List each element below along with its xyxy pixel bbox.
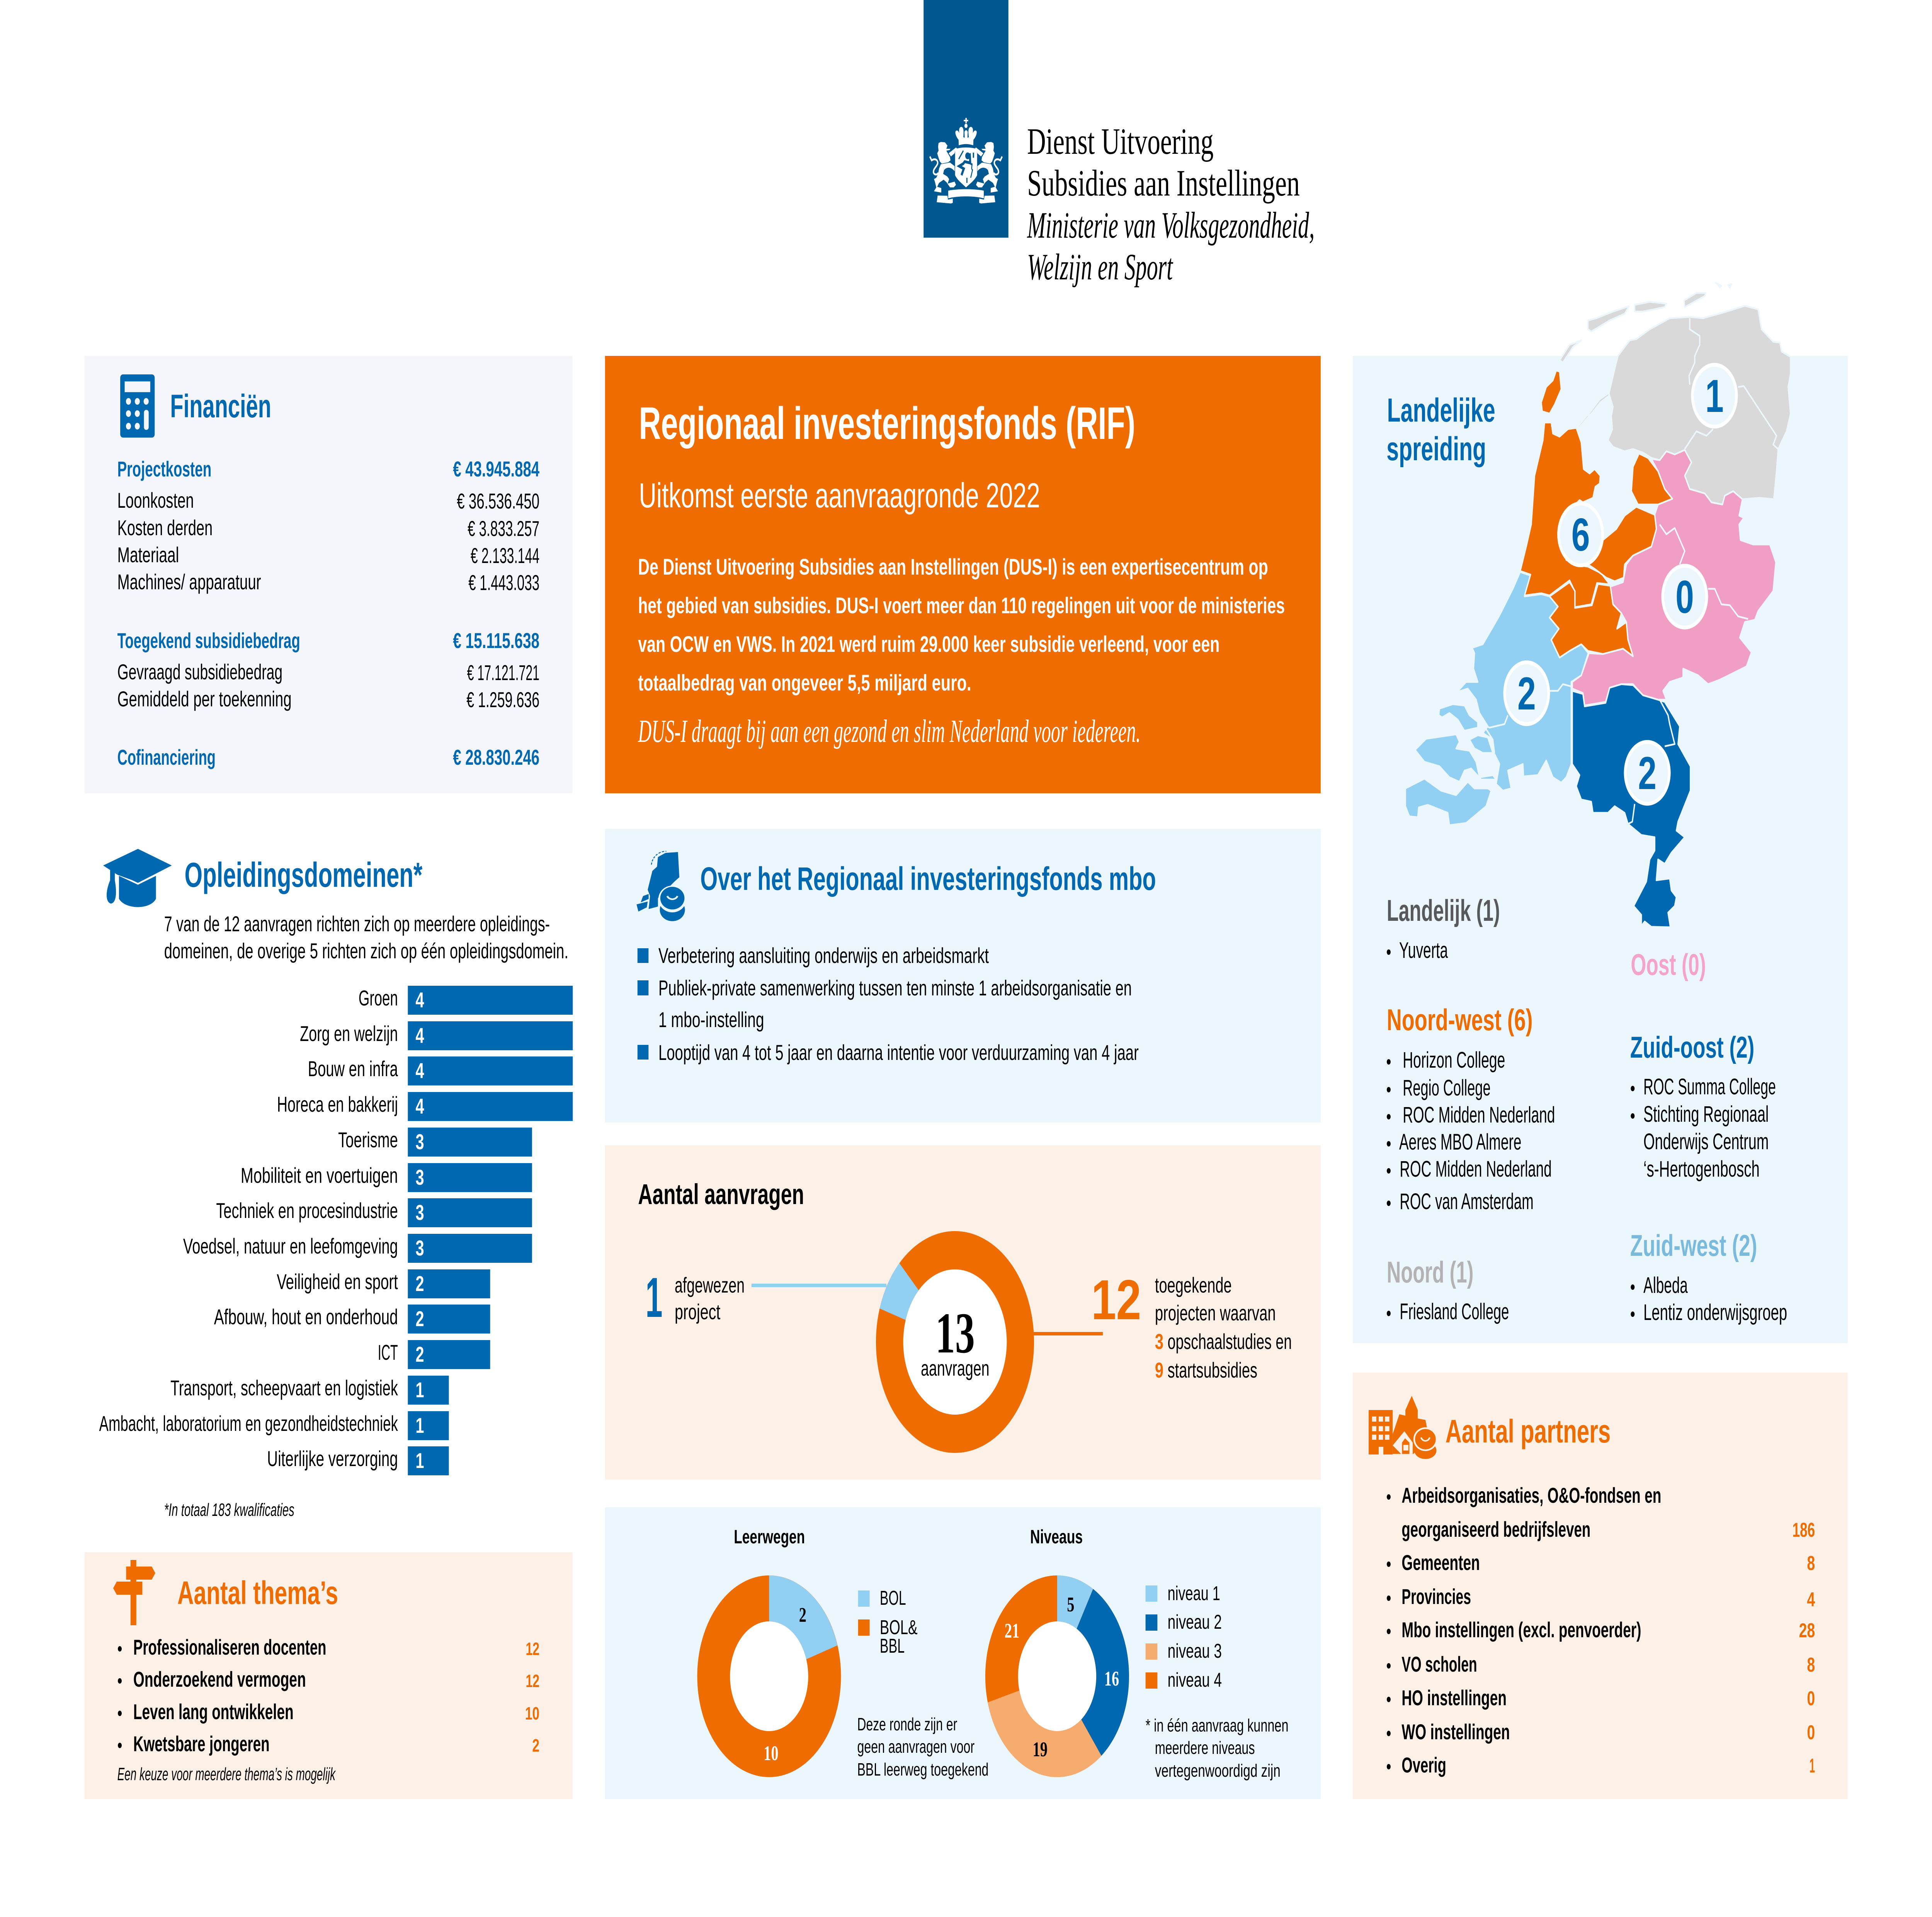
table: project costs: Cofinanciering bbox=[117, 745, 216, 770]
legend: Leerwegen: BBL bbox=[880, 1635, 905, 1657]
list: partners: 28 bbox=[1799, 1619, 1815, 1642]
legend: Niveaus: niveau 2 bbox=[1168, 1611, 1222, 1633]
donut chart: 13 aanvragen: aanvragen bbox=[921, 1356, 990, 1381]
list: Noord-west: ROC Midden Nederland bbox=[1400, 1156, 1552, 1182]
panel: Over het Regionaal investeringsfonds mbo bbox=[605, 829, 1321, 1123]
bar chart: domains: Veiligheid en sport bbox=[277, 1270, 398, 1294]
callout: 1 afgewezen: project bbox=[675, 1300, 721, 1324]
list: Noord-west: ROC Midden Nederland bbox=[1403, 1102, 1555, 1128]
bar chart: domains: 4 bbox=[415, 1024, 424, 1048]
note: Leerwegen: geen aanvragen voor bbox=[857, 1737, 975, 1757]
legend: Niveaus: niveau 3 bbox=[1168, 1640, 1222, 1662]
list: Zuid-oost: Stichting Regionaal bbox=[1643, 1101, 1769, 1127]
map counters: 1 bbox=[1705, 371, 1724, 422]
list: Landelijk: Yuverta bbox=[1399, 937, 1448, 963]
list: Zuid-west: Lentiz onderwijsgroep bbox=[1643, 1300, 1787, 1325]
list: Zuid-west: Zuid-west (2) bbox=[1630, 1229, 1757, 1262]
map: Netherlands regions bbox=[1405, 283, 1791, 927]
sender name bbox=[1027, 121, 1315, 288]
table: project costs: Projectkosten bbox=[117, 457, 211, 481]
bar chart: domains: Techniek en procesindustrie bbox=[216, 1199, 398, 1223]
panel: Aantal thema's bbox=[85, 1552, 573, 1799]
table: project costs: € 17.121.721 bbox=[467, 661, 539, 685]
icon: royal coat of arms bbox=[930, 118, 1002, 204]
panel: Aantal partners bbox=[1353, 1373, 1848, 1799]
region borders bbox=[1483, 318, 1778, 824]
table: project costs: Kosten derden bbox=[117, 516, 213, 540]
bar chart: domains: 1 bbox=[415, 1449, 424, 1473]
list: Noord: Friesland College bbox=[1400, 1299, 1509, 1324]
bullet list bbox=[638, 944, 1139, 1065]
map counters: 2 bbox=[1638, 748, 1656, 799]
table: project costs: Toegekend subsidiebedrag bbox=[117, 629, 300, 653]
bullet list: Publiek-private samenwerking tussen ten minste 1 arbeidsorganisatie en bbox=[658, 976, 1132, 1000]
title: Regionaal investeringsfonds (RIF) bbox=[639, 398, 1135, 449]
legend: Niveaus: niveau 4 bbox=[1168, 1669, 1222, 1691]
table: project costs: € 28.830.246 bbox=[453, 745, 539, 770]
list: partners: 8 bbox=[1807, 1653, 1815, 1676]
sender name: Welzijn en Sport bbox=[1027, 247, 1173, 288]
map counters bbox=[1505, 365, 1736, 804]
heading: Leerwegen: Leerwegen bbox=[734, 1526, 805, 1548]
bar chart: domains: Afbouw, hout en onderhoud bbox=[214, 1305, 398, 1329]
legend: Leerwegen bbox=[858, 1587, 918, 1657]
intro paragraph bbox=[638, 554, 1285, 696]
panel: Aantal aanvragen bbox=[605, 1145, 1321, 1480]
list: partners: Arbeidsorganisaties, O&O-fondsen en bbox=[1401, 1483, 1661, 1508]
intro paragraph: totaalbedrag van ongeveer 5,5 miljard euro. bbox=[638, 670, 971, 696]
donut chart: Leerwegen bbox=[714, 1575, 837, 1765]
list: themes: Onderzoekend vermogen bbox=[133, 1667, 306, 1692]
heading: Financiën: Financiën bbox=[170, 388, 271, 424]
region: Oost bbox=[1572, 450, 1776, 706]
list: partners: Overig bbox=[1401, 1753, 1446, 1778]
tagline: DUS-I draagt bij aan een gezond en slim Nederland voor iedereen. bbox=[638, 713, 1141, 749]
heading: Over het Regionaal investeringsfonds mbo bbox=[700, 861, 1156, 897]
bullet list: Looptijd van 4 tot 5 jaar en daarna intentie voor verduurzaming van 4 jaar bbox=[658, 1041, 1139, 1065]
panel: Financiën bbox=[85, 356, 573, 793]
heading: Landelijke spreiding bbox=[1386, 391, 1495, 467]
list: themes: 2 bbox=[532, 1736, 539, 1755]
callout: 1 afgewezen: 1 bbox=[645, 1266, 663, 1329]
note: Niveaus: meerdere niveaus bbox=[1155, 1738, 1255, 1758]
bar chart: domains: 2 bbox=[415, 1272, 424, 1296]
list: themes: 10 bbox=[525, 1704, 539, 1723]
table: project costs: Materiaal bbox=[117, 543, 179, 567]
bar chart: domains: 1 bbox=[415, 1378, 424, 1402]
connector lines bbox=[752, 1284, 1103, 1335]
bar chart: domains: 3 bbox=[415, 1201, 424, 1225]
sender name: Ministerie van Volksgezondheid, bbox=[1027, 205, 1315, 246]
icon: buildings and coins bbox=[1369, 1396, 1437, 1459]
list: themes: Professionaliseren docenten bbox=[133, 1635, 326, 1660]
icon: calculator bbox=[120, 374, 155, 438]
table: project costs: € 43.945.884 bbox=[453, 457, 539, 481]
heading: Niveaus: Niveaus bbox=[1030, 1526, 1083, 1548]
list: Zuid-oost bbox=[1630, 1031, 1776, 1182]
bar chart: domains: Voedsel, natuur en leefomgeving bbox=[183, 1234, 398, 1259]
table: project costs: € 15.115.638 bbox=[453, 629, 539, 653]
icon: map with coins bbox=[636, 851, 686, 921]
list: Landelijk bbox=[1387, 894, 1500, 963]
table: project costs: € 3.833.257 bbox=[468, 517, 539, 541]
bar chart: domains: 3 bbox=[415, 1236, 424, 1260]
bar chart: domains: 2 bbox=[415, 1307, 424, 1331]
intro text bbox=[164, 912, 568, 963]
list: Zuid-oost: ROC Summa College bbox=[1643, 1074, 1776, 1099]
note: Niveaus: vertegenwoordigd zijn bbox=[1155, 1761, 1281, 1781]
list: partners: Provincies bbox=[1401, 1585, 1471, 1609]
bar chart: domains: Toerisme bbox=[338, 1128, 398, 1152]
note: Leerwegen: BBL leerweg toegekend bbox=[857, 1760, 988, 1779]
list: partners: Gemeenten bbox=[1401, 1551, 1480, 1575]
bar chart: domains: Horeca en bakkerij bbox=[277, 1092, 398, 1117]
callout: 1 afgewezen bbox=[645, 1266, 745, 1329]
intro paragraph: het gebied van subsidies. DUS-I voert meer dan 110 regelingen uit voor de ministeries bbox=[638, 593, 1285, 618]
donut chart: Niveaus: 16 bbox=[1104, 1667, 1119, 1691]
list: themes: Kwetsbare jongeren bbox=[133, 1732, 270, 1756]
header: logo and sender bbox=[923, 0, 1315, 288]
donut chart: 13 aanvragen: 13 bbox=[935, 1301, 975, 1365]
bar chart: domains: Transport, scheepvaart en logistiek bbox=[170, 1376, 398, 1400]
callout: 12 toegekend: toegekende bbox=[1155, 1273, 1232, 1298]
subtitle: Uitkomst eerste aanvraagronde 2022 bbox=[639, 476, 1040, 515]
icon: graduation cap bbox=[103, 849, 172, 907]
logo bar with crest bbox=[923, 0, 1009, 238]
list: Zuid-west: Albeda bbox=[1643, 1272, 1688, 1298]
bar chart: domains: 3 bbox=[415, 1165, 424, 1190]
list: partners: 0 bbox=[1807, 1687, 1815, 1710]
list: partners bbox=[1387, 1483, 1815, 1778]
note: Niveaus bbox=[1146, 1716, 1289, 1781]
bar chart: domains: Uiterlijke verzorging bbox=[267, 1447, 398, 1471]
list: themes: 12 bbox=[526, 1640, 539, 1659]
callout: 12 toegekend bbox=[1091, 1268, 1292, 1383]
bar chart: domains: Mobiliteit en voertuigen bbox=[241, 1163, 398, 1188]
list: themes: Leven lang ontwikkelen bbox=[133, 1700, 294, 1724]
list: Zuid-oost: Onderwijs Centrum bbox=[1643, 1129, 1769, 1154]
map counters: 6 bbox=[1571, 509, 1590, 561]
heading: Opleidingsdomeinen: Opleidingsdomeinen* bbox=[184, 855, 423, 895]
donut chart: Leerwegen: 2 bbox=[799, 1604, 806, 1627]
list: Zuid-oost: Zuid-oost (2) bbox=[1630, 1031, 1754, 1064]
list: themes: 12 bbox=[526, 1672, 539, 1691]
list: Noord bbox=[1387, 1256, 1509, 1324]
intro paragraph: van OCW en VWS. In 2021 werd ruim 29.000 keer subsidie verleend, voor een bbox=[638, 631, 1219, 657]
table: project costs: € 1.259.636 bbox=[466, 688, 539, 712]
list: Noord-west: Regio College bbox=[1403, 1075, 1491, 1101]
bar chart: domains: Zorg en welzijn bbox=[300, 1022, 398, 1046]
list: partners: Mbo instellingen (excl. penvoerder) bbox=[1401, 1618, 1641, 1642]
note: Niveaus: * in één aanvraag kunnen bbox=[1146, 1716, 1289, 1735]
panel: intro orange bbox=[605, 356, 1321, 793]
list: themes bbox=[118, 1635, 539, 1756]
heading: Aantal thema's: Aantal thema’s bbox=[177, 1575, 338, 1611]
list: partners: 4 bbox=[1807, 1588, 1815, 1611]
bar chart: domains: ICT bbox=[378, 1340, 398, 1365]
region: Noord bbox=[1560, 283, 1791, 505]
callout: 12 toegekend: startsubsidies bbox=[1168, 1358, 1257, 1383]
callout: 12 toegekend: 3 bbox=[1155, 1330, 1163, 1354]
list: partners: georganiseerd bedrijfsleven bbox=[1401, 1517, 1590, 1542]
list: Noord-west: ROC van Amsterdam bbox=[1400, 1189, 1534, 1214]
bar chart: domains: 1 bbox=[415, 1414, 424, 1438]
bar chart: domains: 3 bbox=[415, 1130, 424, 1154]
list: partners: VO scholen bbox=[1401, 1652, 1477, 1677]
donut chart: Leerwegen: 10 bbox=[764, 1742, 779, 1765]
table: project costs: Gevraagd subsidiebedrag bbox=[117, 660, 282, 684]
heading: Landelijke spreiding: spreiding bbox=[1386, 430, 1486, 467]
table: project costs: € 36.536.450 bbox=[457, 489, 539, 514]
list: Zuid-west bbox=[1630, 1229, 1787, 1325]
panel: Opleidingsdomeinen bbox=[99, 849, 573, 1520]
list: Landelijk: Landelijk (1) bbox=[1387, 894, 1500, 927]
table: project costs: Gemiddeld per toekenning bbox=[117, 687, 292, 711]
bar chart: domains: 4 bbox=[415, 1094, 424, 1119]
bar chart: domains: Groen bbox=[359, 986, 398, 1010]
list: Noord: Noord (1) bbox=[1387, 1256, 1473, 1289]
list: Noord-west bbox=[1387, 1004, 1555, 1214]
bar chart: domains bbox=[99, 986, 573, 1475]
note: Leerwegen bbox=[857, 1715, 988, 1779]
sender name: Subsidies aan Instellingen bbox=[1027, 163, 1300, 204]
bullet list: 1 mbo-instelling bbox=[658, 1008, 764, 1032]
footnote: *In totaal 183 kwalificaties bbox=[164, 1500, 294, 1520]
intro paragraph: De Dienst Uitvoering Subsidies aan Instellingen (DUS-I) is een expertisecentrum op bbox=[638, 554, 1268, 580]
heading: Landelijke spreiding: Landelijke bbox=[1387, 391, 1495, 429]
list: partners: WO instellingen bbox=[1401, 1720, 1510, 1744]
list: partners: 0 bbox=[1807, 1721, 1815, 1744]
callout: 12 toegekend: opschaalstudies en bbox=[1168, 1330, 1292, 1354]
donut chart: Niveaus bbox=[988, 1575, 1129, 1777]
callout: 12 toegekend: 12 bbox=[1091, 1268, 1141, 1331]
legend: Leerwegen: BOL bbox=[880, 1587, 906, 1609]
table: project costs: Machines/ apparatuur bbox=[117, 570, 261, 594]
map counters: 2 bbox=[1517, 668, 1536, 720]
table: project costs: Loonkosten bbox=[117, 488, 194, 513]
donut chart: Niveaus: 19 bbox=[1032, 1738, 1048, 1761]
legend: Niveaus bbox=[1146, 1582, 1222, 1691]
intro text: 7 van de 12 aanvragen richten zich op meerdere opleidings- bbox=[164, 912, 550, 936]
intro text: domeinen, de overige 5 richten zich op één opleidingsdomein. bbox=[164, 939, 568, 963]
panel: Landelijke spreiding bbox=[1353, 283, 1848, 1343]
bar chart: domains: Ambacht, laboratorium en gezondheidstechniek bbox=[99, 1412, 398, 1436]
bar chart: domains: 2 bbox=[415, 1342, 424, 1367]
donut chart: 13 aanvragen bbox=[880, 1250, 1020, 1434]
region: Zuid-oost bbox=[1572, 684, 1690, 927]
legend: Leerwegen: BOL& bbox=[880, 1616, 918, 1639]
callout: 12 toegekend: projecten waarvan bbox=[1155, 1301, 1276, 1325]
legend: Niveaus: niveau 1 bbox=[1168, 1582, 1220, 1605]
heading: Aantal partners: Aantal partners bbox=[1446, 1414, 1611, 1449]
heading: Aantal aanvragen bbox=[638, 1178, 804, 1210]
note: Een keuze voor meerdere thema’s is mogelijk bbox=[117, 1765, 336, 1784]
table: project costs: € 1.443.033 bbox=[468, 571, 539, 595]
callout: 12 toegekend: 9 bbox=[1155, 1358, 1163, 1383]
list: Zuid-oost: ‘s-Hertogenbosch bbox=[1643, 1156, 1760, 1182]
list: Noord-west: Noord-west (6) bbox=[1387, 1004, 1533, 1037]
bar chart: domains: 4 bbox=[415, 1059, 424, 1083]
list: Noord-west: Aeres MBO Almere bbox=[1399, 1129, 1521, 1155]
list: Noord-west: Horizon College bbox=[1403, 1047, 1505, 1073]
region: Zuid-west bbox=[1405, 572, 1588, 825]
list: partners: 186 bbox=[1793, 1519, 1815, 1541]
table: project costs: € 2.133.144 bbox=[471, 544, 539, 568]
panel: Leerwegen en Niveaus bbox=[605, 1507, 1321, 1799]
note: Leerwegen: Deze ronde zijn er bbox=[857, 1715, 957, 1734]
list: partners: HO instellingen bbox=[1401, 1686, 1507, 1710]
sender name: Dienst Uitvoering bbox=[1027, 121, 1214, 162]
list: partners: 1 bbox=[1810, 1754, 1815, 1777]
donut chart: Niveaus: 21 bbox=[1005, 1619, 1019, 1643]
table: project costs bbox=[117, 457, 539, 770]
donut chart: Niveaus: 5 bbox=[1067, 1593, 1074, 1616]
list: Oost: Oost (0) bbox=[1631, 948, 1706, 981]
icon: signpost bbox=[113, 1560, 155, 1625]
region: Noord-west bbox=[1520, 371, 1672, 658]
bullet list: Verbetering aansluiting onderwijs en arbeidsmarkt bbox=[658, 944, 989, 968]
map counters: 0 bbox=[1675, 572, 1694, 623]
callout: 1 afgewezen: afgewezen bbox=[675, 1273, 745, 1298]
list: partners: 8 bbox=[1807, 1552, 1815, 1575]
bar chart: domains: Bouw en infra bbox=[308, 1057, 398, 1081]
bar chart: domains: 4 bbox=[415, 988, 424, 1012]
